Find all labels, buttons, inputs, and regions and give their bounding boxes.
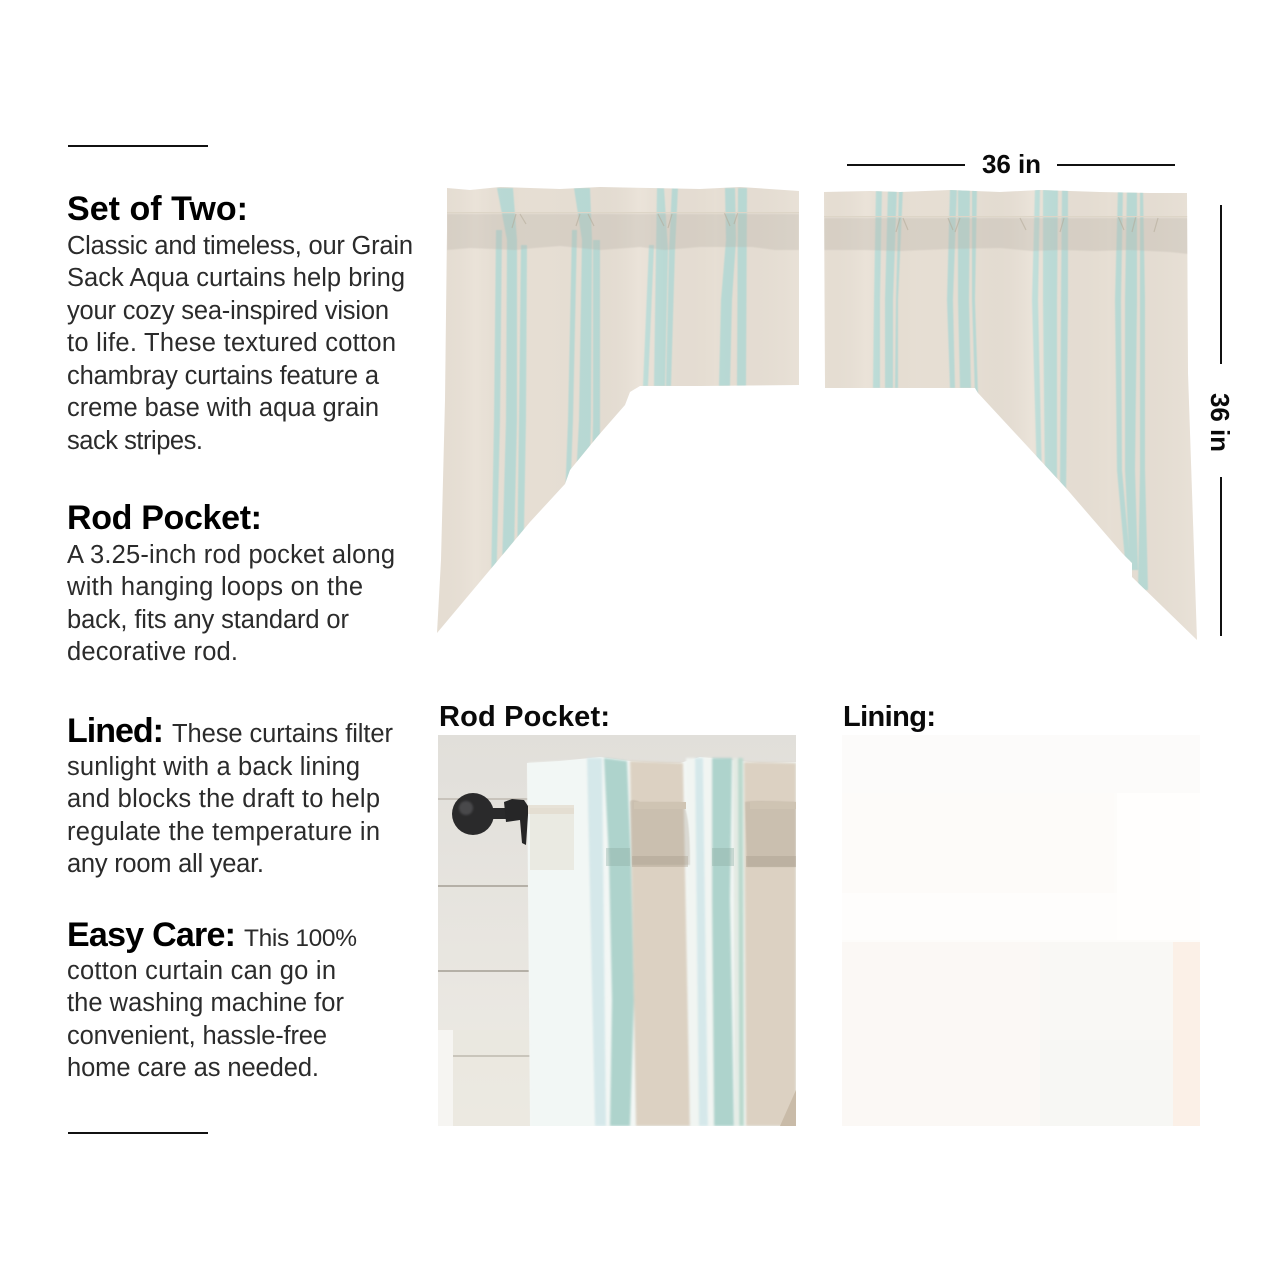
- label: lining photo: Lining:: [843, 701, 936, 733]
- fabric folds: [820, 185, 1205, 645]
- text block: easy care: cotton curtain can go in: [67, 957, 336, 985]
- width dimension: 36 in: 36 in: [982, 149, 1041, 179]
- text block: set of two: Set of Two:: [67, 190, 248, 228]
- left curtain panel: [430, 180, 810, 640]
- text block: lined: any room all year.: [67, 850, 264, 878]
- text block: rod pocket: with hanging loops on the: [66, 573, 363, 601]
- height dimension: 36 in: 36 in: [1205, 393, 1235, 452]
- text block: easy care: [67, 916, 357, 1082]
- rod pocket band: [824, 218, 1188, 254]
- rod pocket band: [447, 214, 799, 250]
- curtain fabric: [527, 757, 796, 1126]
- curtain rod finial: [452, 793, 528, 845]
- bottom rule: [68, 1132, 208, 1134]
- text block: rod pocket: Rod Pocket:: [67, 499, 262, 537]
- text block: easy care: Easy Care:: [67, 916, 236, 954]
- gathers: [896, 216, 1158, 232]
- text block: lined: regulate the temperature in: [67, 818, 380, 846]
- text block: easy care: This 100%: [244, 925, 357, 952]
- text block: easy care: convenient, hassle-free: [67, 1022, 327, 1050]
- text block: easy care: home care as needed.: [67, 1054, 319, 1082]
- right curtain panel: [820, 185, 1205, 645]
- text block: set of two: Sack Aqua curtains help bring: [67, 264, 405, 292]
- text block: set of two: Classic and timeless, our Grain: [67, 232, 413, 260]
- photo: rod pocket close-up: [438, 735, 796, 1126]
- text block: rod pocket: [66, 499, 395, 666]
- text block: rod pocket: decorative rod.: [67, 638, 238, 666]
- text block: lined: and blocks the draft to help: [67, 785, 380, 813]
- fabric folds: [430, 180, 810, 640]
- label: rod pocket photo: Rod Pocket:: [439, 701, 610, 733]
- gathers: [512, 212, 738, 228]
- text block: set of two: [67, 190, 413, 455]
- text block: lined: Lined:: [67, 712, 164, 750]
- text block: lined: [67, 712, 394, 878]
- text block: set of two: to life. These textured cotton: [67, 329, 396, 357]
- rod pocket shading: [528, 800, 796, 870]
- top rule: [68, 145, 208, 147]
- wall with shiplap: [438, 735, 796, 1126]
- text block: lined: These curtains filter: [172, 720, 394, 748]
- text block: easy care: the washing machine for: [67, 989, 344, 1017]
- text block: rod pocket: back, fits any standard or: [67, 606, 350, 634]
- curtain lower fold: [780, 1090, 796, 1126]
- text block: lined: sunlight with a back lining: [67, 753, 360, 781]
- text block: set of two: creme base with aqua grain: [67, 394, 379, 422]
- text block: set of two: your cozy sea-inspired vision: [67, 297, 389, 325]
- text block: set of two: sack stripes.: [67, 427, 203, 455]
- photo: lining close-up: [842, 735, 1200, 1126]
- text block: set of two: chambray curtains feature a: [67, 362, 380, 390]
- text block: rod pocket: A 3.25-inch rod pocket along: [67, 541, 395, 569]
